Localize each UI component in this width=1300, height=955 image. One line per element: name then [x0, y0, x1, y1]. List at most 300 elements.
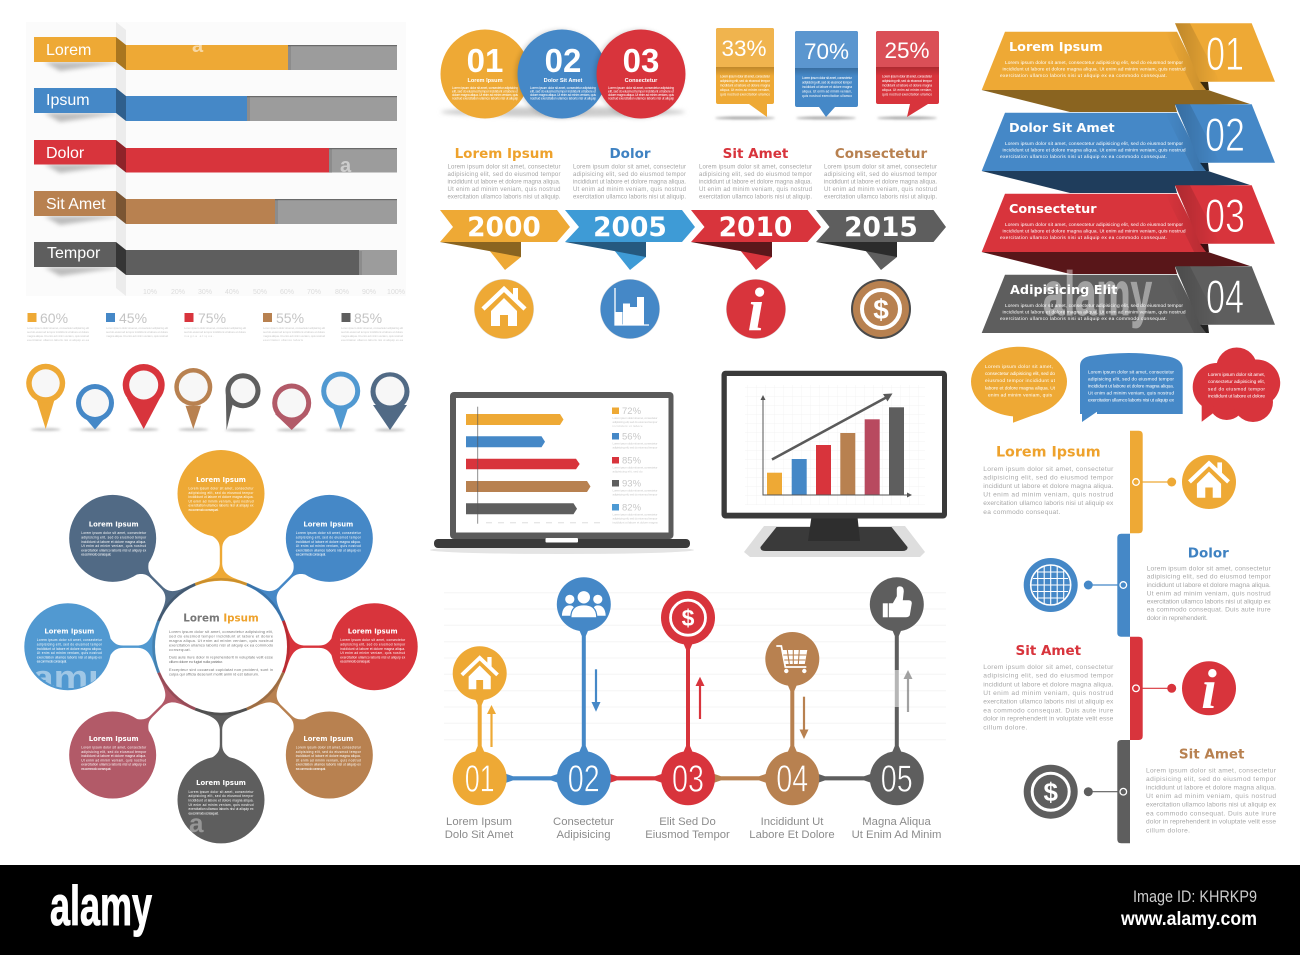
legend item 45%: Lorem ipsum dolor sit amet, consectetur adipisicing elit	[106, 326, 168, 330]
footer url: www.alamy.com	[1120, 909, 1257, 930]
petal shapes: bottom left rose	[51, 616, 252, 817]
circle 03	[596, 30, 686, 118]
timeline row: Sit Amet: ea commodo consequat. Duis aute irure	[983, 707, 1114, 714]
circle 01: dolore magna aliqua. Ut enim ad minim veniam, quis	[452, 93, 518, 97]
petal text: left: Lorem Ipsum	[44, 628, 94, 636]
arrow 2000	[440, 210, 570, 270]
monitor with growth bar chart	[722, 371, 947, 557]
circle 02: 02	[545, 42, 581, 79]
step 01: 01	[465, 759, 495, 801]
petal shapes: left light blue	[24, 603, 221, 690]
ribbon 02: Lorem ipsum dolor sit amet, consectetur adipisicing elit, sed do eiusmod tempor	[1005, 141, 1183, 147]
timeline row: Dolor: Ut enim ad minim veniam, quis nostrud	[1147, 590, 1271, 597]
arrow up	[696, 677, 704, 719]
box 33%: aliqua. Ut enim ad minim veniam,	[720, 88, 770, 92]
ribbon 02: 02	[1205, 108, 1245, 161]
circle 02: Lorem ipsum dolor sit amet, consectetur adipisicing	[530, 86, 596, 90]
column: Lorem Ipsum: exercitation ullamco laboris nisi ut aliquip.	[448, 194, 561, 200]
pin rose	[272, 384, 311, 431]
petal text: top	[188, 476, 254, 512]
circle 02: elit, sed do eiusmod tempor incididunt ut labore et	[530, 90, 596, 94]
bar row: Dolor	[34, 140, 397, 177]
circle 02: Dolor Sit Amet	[544, 78, 582, 84]
petal text: top left: Ut enim ad minim veniam, quis nostrud	[81, 544, 146, 548]
column: Consectetur	[824, 146, 937, 200]
timeline row: Sit Amet: adipisicing elit, sed do eiusmod tempor	[983, 673, 1114, 680]
icon: people	[561, 590, 606, 618]
ribbon 02: Dolor Sit Amet	[1009, 121, 1115, 136]
legend item 45%: 45%	[119, 310, 147, 326]
panel: percentage speech boxes	[715, 28, 939, 119]
pin tan	[174, 368, 212, 431]
center circle: sed do eiusmod tempor incididunt ut labore et dolore	[169, 634, 273, 638]
watermark on bottom petal: a	[189, 808, 204, 838]
petal text: top right: exercitation ullamco laboris nisi ut aliquip ex	[296, 548, 361, 552]
laptop legend: Lorem ipsum dolor sit amet, consectetur	[612, 416, 658, 420]
petal text: bottom left: exercitation ullamco laboris nisi ut aliquip ex	[81, 763, 147, 767]
box 33%	[715, 28, 775, 119]
box 70%: aliqua. Ut enim ad minim veniam,	[802, 90, 852, 94]
circle 03: Consectetur	[625, 78, 658, 84]
column: Dolor	[573, 146, 686, 200]
bubble: oval: consectetur adipisicing elit, sed do	[985, 371, 1055, 377]
box 25%: incididunt ut labore et dolore magna	[882, 84, 932, 88]
laptop legend: adipisicing elit, sed do eiusmod tempor	[612, 492, 658, 496]
petal text: bottom right: adipisicing elit, sed do eiusmod tempor	[296, 750, 362, 754]
box 33%: 33%	[721, 36, 767, 61]
column: Sit Amet: Ut enim ad minim veniam, quis nostrud	[699, 187, 812, 193]
petal text: right: Lorem ipsum dolor sit amet, consectetur	[340, 638, 406, 642]
panel: year timeline arrows	[440, 210, 946, 270]
pin light blue	[321, 372, 360, 431]
timeline row: Sit Amet second: dolor in reprehenderit in voluptate velit esse	[1146, 819, 1276, 826]
pin red	[123, 364, 165, 431]
footer logo: alamy	[50, 874, 152, 937]
circle 03: dolore magna aliqua. Ut enim ad minim veniam, quis	[608, 93, 674, 97]
box 70%: incididunt ut labore et dolore magna	[802, 85, 852, 89]
petal text: top: Ut enim ad minim veniam, quis nostrud	[188, 499, 254, 503]
legend item 85%: exercitation ullamco laboris nisi ut aliquip ex ea	[341, 338, 403, 342]
ribbon 03: incididunt ut labore et dolore magna aliqua. Ut enim ad minim veniam, quis nostrud	[1002, 228, 1186, 234]
laptop legend: Lorem ipsum dolor sit amet, consectetur	[612, 488, 658, 492]
pin gray	[225, 373, 260, 431]
laptop legend: 85%	[622, 456, 642, 466]
chart axis labels: 30%	[198, 289, 212, 296]
laptop legend: 56%	[622, 432, 642, 442]
timeline row: Lorem Ipsum: Lorem ipsum dolor sit amet, consectetur	[983, 466, 1114, 473]
icon: house badge	[474, 279, 534, 339]
legend item 85%: Lorem ipsum dolor sit amet, consectetur adipisicing elit	[341, 326, 403, 330]
timeline row: Dolor: Lorem ipsum dolor sit amet, consectetur	[1147, 565, 1271, 572]
column: Sit Amet	[699, 146, 812, 200]
timeline row: Dolor: ea commodo consequat. Duis aute irure	[1147, 607, 1271, 614]
petal text: top: Lorem Ipsum	[196, 476, 246, 484]
step 02: 02	[568, 759, 600, 801]
laptop bars	[466, 407, 600, 524]
ribbon 04: exercitation ullamco laboris nisi ut aliquip ex ea commodo consequat.	[1000, 316, 1167, 322]
column: Consectetur: Lorem ipsum dolor sit amet, consectetur	[824, 164, 937, 170]
bar row: Sit Amet	[34, 191, 397, 225]
icon: dollar: $	[1043, 777, 1058, 807]
bubble: oval: enim ad minim veniam, quis	[988, 392, 1053, 398]
bar row: Dolor: a	[340, 155, 352, 177]
laptop legend: 93%	[622, 478, 642, 490]
timeline row: Sit Amet: Sit Amet	[1015, 643, 1082, 659]
petal text: right: adipisicing elit, sed do eiusmod tempor	[340, 642, 406, 646]
laptop legend: Lorem ipsum dolor sit amet, consectetur	[612, 512, 658, 516]
timeline row: Sit Amet second: Lorem ipsum dolor sit amet, consectetur	[1146, 767, 1277, 774]
chart axis labels: 10%	[143, 289, 157, 296]
panel: four text columns	[448, 146, 937, 200]
bubble: rectangle	[1080, 353, 1183, 422]
bubble: rectangle: Ut enim ad minim veniam, quis nostrud	[1088, 391, 1174, 397]
laptop legend: incididunt ut labore	[612, 424, 643, 428]
center circle: culpa qui officia deserunt mollit anim id est laborum.	[169, 671, 259, 676]
step 02: Adipisicing	[556, 829, 611, 841]
petal text: bottom: exercitation ullamco laboris nisi ut aliquip ex	[188, 807, 254, 811]
petal text: right	[340, 628, 406, 664]
timeline row: Sit Amet: cillum dolore.	[983, 724, 1027, 731]
timeline row: Sit Amet: dolor in reprehenderit in voluptate velit esse	[983, 716, 1114, 723]
bar row: Lorem: Lorem	[46, 42, 91, 59]
center circle: Lorem ipsum dolor sit amet, consectetur adipisicing elit,	[169, 629, 273, 634]
laptop legend: adipisicing elit, sed do eiusmod tempor	[612, 446, 658, 450]
circle 01	[440, 30, 530, 118]
bar row: Sit Amet: Sit Amet	[46, 196, 106, 213]
laptop legend: 72%	[622, 406, 642, 417]
icon: info badge: i	[748, 277, 765, 344]
ribbon 03: 03	[1205, 189, 1245, 242]
legend item 75%: sed do eiusmod tempor incididunt ut labore et dolore	[184, 330, 246, 334]
petal text: bottom right: incididunt ut labore et dolore magna aliqua.	[296, 754, 361, 758]
petal text: bottom: Lorem ipsum dolor sit amet, consectetur	[188, 790, 254, 794]
timeline row: Sit Amet second: Ut enim ad minim veniam, quis nostrud	[1146, 793, 1276, 800]
step 01: Lorem Ipsum	[446, 816, 512, 828]
petal text: left	[37, 628, 103, 664]
column: Consectetur: Consectetur	[835, 146, 927, 162]
bubble: oval: eiusmod tempor incididunt ut	[985, 378, 1056, 384]
petal text: bottom right: exercitation ullamco laboris nisi ut aliquip ex	[296, 763, 361, 767]
laptop legend: adipisicing elit, sed do eiusmod tempor	[612, 420, 658, 424]
bubble: rectangle: exercitation ullamco laboris nisi ut aliquip ex	[1088, 398, 1175, 404]
center circle: exercitation ullamco laboris nisi ut aliquip ex ea commodo	[169, 642, 273, 648]
circle 03: elit, sed do eiusmod tempor incididunt ut labore et	[608, 90, 674, 94]
ribbon 04: incididunt ut labore et dolore magna aliqua. Ut enim ad minim veniam, quis nostrud	[1002, 310, 1186, 316]
arrow up	[487, 705, 496, 747]
bubble: cloud: consectetur adipisicing elit,	[1208, 379, 1265, 385]
column: Dolor: adipisicing elit, sed do eiusmod tempor	[573, 172, 686, 178]
petal text: left: incididunt ut labore et dolore magna aliqua.	[37, 647, 102, 651]
legend item 85%: magna aliqua. Ut enim ad minim veniam, quis nostrud	[341, 334, 403, 338]
pin orange	[26, 364, 65, 431]
legend item 60%: sed do eiusmod tempor incididunt ut labore et dolore	[27, 330, 89, 334]
panel: ribbon list	[982, 23, 1275, 333]
pin navy	[370, 372, 410, 431]
petal text: top left: exercitation ullamco laboris nisi ut aliquip ex	[81, 548, 147, 552]
petal text: bottom left: incididunt ut labore et dolore magna aliqua.	[81, 754, 146, 758]
arrow down	[800, 697, 808, 739]
step 04: Incididunt Ut	[761, 816, 824, 828]
timeline row: Lorem Ipsum: adipisicing elit, sed do eiusmod tempor	[983, 475, 1114, 482]
petal text: top right: adipisicing elit, sed do eiusmod tempor	[296, 536, 362, 540]
legend item 45%: sed do eiusmod tempor incididunt ut labore et dolore	[106, 330, 168, 334]
laptop legend: adipisicing elit, sed do	[612, 470, 643, 474]
laptop legend: 82%	[622, 502, 642, 514]
petal text: bottom: incididunt ut labore et dolore magna aliqua.	[188, 799, 254, 803]
timeline row: Dolor: adipisicing elit, sed do eiusmod tempor	[1147, 574, 1271, 581]
column: Dolor: Ut enim ad minim veniam, quis nostrud	[573, 187, 686, 193]
box 70%: quis nostrud exercitation ullamco	[802, 94, 852, 98]
petal text: bottom: ea commodo consequat.	[188, 811, 219, 815]
arrow 2010	[691, 210, 821, 270]
ribbon 01: incididunt ut labore et dolore magna aliqua. Ut enim ad minim veniam, quis nostrud	[1002, 66, 1186, 72]
petal shapes: right red	[221, 603, 418, 690]
step 03: Eiusmod Tempor	[645, 829, 730, 841]
chart axis labels	[143, 289, 405, 296]
watermark on left petal: amu	[32, 659, 112, 695]
timeline row: Lorem Ipsum: ea commodo consequat.	[983, 509, 1060, 516]
petal text: top: incididunt ut labore et dolore magna aliqua.	[188, 495, 254, 499]
column: Dolor: Lorem ipsum dolor sit amet, consectetur	[573, 164, 686, 170]
petal text: right: incididunt ut labore et dolore magna aliqua.	[340, 647, 405, 651]
box 70%: adipisicing elit, sed do eiusmod tempor	[802, 80, 853, 84]
legend item 60%: 60%	[40, 310, 68, 326]
bar row: Ipsum: Ipsum	[46, 92, 90, 109]
timeline row: Sit Amet second: adipisicing elit, sed do eiusmod tempor	[1146, 776, 1277, 783]
bar row: Tempor: Tempor	[47, 245, 101, 262]
bubble: cloud	[1193, 348, 1280, 422]
panel: speech bubbles	[971, 347, 1280, 423]
chart axis labels: 90%	[362, 289, 376, 296]
panel: horizontal bar chart	[26, 22, 406, 296]
column: Lorem Ipsum: adipisicing elit, sed do eiusmod tempor	[448, 172, 560, 178]
center circle: Lorem Ipsum	[183, 613, 259, 625]
petal text: top: adipisicing elit, sed do eiusmod tempor	[188, 491, 254, 495]
chart axis labels: 20%	[171, 289, 185, 296]
step 03	[645, 591, 730, 841]
column: Consectetur: exercitation ullamco laboris nisi ut aliquip.	[824, 194, 937, 200]
petal text: right: ea commodo consequat.	[340, 660, 370, 664]
step 05	[852, 577, 941, 841]
ribbon 02	[982, 104, 1275, 193]
center circle: consequat.	[169, 647, 191, 652]
box 33%: incididunt ut labore et dolore magna	[720, 84, 770, 88]
petal text: top: ea commodo consequat.	[188, 508, 219, 512]
step 02	[553, 577, 614, 841]
ribbon 04: Adipisicing Elit	[1010, 283, 1117, 298]
bar row: Lorem: a	[192, 35, 204, 57]
legend item 85%: 85%	[354, 310, 382, 326]
petal text: bottom: Ut enim ad minim veniam, quis nostrud	[188, 803, 254, 807]
box 25%	[876, 31, 939, 119]
ribbon 01: exercitation ullamco laboris nisi ut aliquip ex ea commodo consequat.	[1000, 73, 1167, 79]
petal shapes: top orange	[178, 450, 264, 647]
petal text: bottom left: adipisicing elit, sed do eiusmod tempor	[81, 750, 147, 754]
arrow 2005	[565, 210, 695, 270]
step 04: 04	[776, 759, 808, 801]
arrow 2015	[816, 210, 946, 270]
ribbon 04: Lorem ipsum dolor sit amet, consectetur adipisicing elit, sed do eiusmod tempor	[1005, 303, 1183, 309]
legend item 75%: Lorem ipsum dolor sit amet, consectetur adipisicing elit	[184, 326, 246, 330]
icon: globe	[1024, 558, 1078, 612]
petal text: top right	[296, 520, 362, 557]
petal text: bottom left	[81, 735, 147, 771]
timeline row: Sit Amet second: Sit Amet	[1179, 746, 1245, 762]
petal text: top: exercitation ullamco laboris nisi ut aliquip ex	[188, 504, 254, 508]
bubble: rectangle: adipisicing elit, sed do eiusmod tempor	[1088, 376, 1174, 382]
box 33%: adipisicing elit, sed do eiusmod tempor	[720, 79, 771, 83]
ribbon 03: exercitation ullamco laboris nisi ut aliquip ex ea commodo consequat.	[1000, 235, 1167, 241]
box 70%: Lorem ipsum dolor sit amet, consectetur	[802, 76, 853, 80]
arrow 2000: 2000	[467, 212, 541, 243]
petal text: bottom: adipisicing elit, sed do eiusmod tempor	[188, 794, 254, 798]
bubble: rectangle: incididunt ut labore et dolore magna aliqua.	[1088, 384, 1174, 390]
legend item 60%	[27, 310, 89, 342]
step 02: Consectetur	[553, 816, 614, 828]
laptop legend: Lorem ipsum dolor sit amet, consectetur	[612, 466, 658, 470]
ribbon 02: exercitation ullamco laboris nisi ut aliquip ex ea commodo consequat.	[1000, 154, 1167, 160]
circle 03: nostrud exercitation ullamco laboris nisi ut aliquip	[608, 96, 674, 100]
petal text: bottom right: Lorem ipsum dolor sit amet, consectetur	[296, 745, 362, 749]
laptop with arrow bar chart	[430, 392, 694, 554]
petal text: bottom left: Ut enim ad minim veniam, quis nostrud	[81, 758, 146, 762]
icon: dollar: $	[682, 605, 695, 631]
legend item 55%: 55%	[276, 310, 304, 326]
circle 01: Lorem ipsum dolor sit amet, consectetur adipisicing	[452, 86, 518, 90]
petal text: left: Lorem ipsum dolor sit amet, consectetur	[37, 638, 103, 642]
step 04: Labore Et Dolore	[749, 829, 835, 841]
bubble: rectangle: Lorem ipsum dolor sit amet, consectetur	[1088, 370, 1174, 376]
step 03: 03	[672, 759, 704, 801]
icon: dollar badge: $	[873, 294, 889, 325]
arrow up	[904, 670, 912, 712]
petal text: top left: adipisicing elit, sed do eiusmod tempor	[81, 536, 147, 540]
timeline row: Lorem Ipsum: Lorem Ipsum	[996, 445, 1101, 461]
legend item 60%: exercitation ullamco laboris nisi ut aliquip ex ea	[27, 338, 89, 342]
circle 01: 01	[467, 42, 503, 79]
petal text: bottom right: Lorem Ipsum	[303, 735, 353, 743]
laptop legend: Lorem ipsum dolor sit amet, consectetur	[612, 442, 658, 446]
timeline row: Dolor: incididunt ut labore et dolore magna aliqua.	[1147, 582, 1271, 589]
petal text: top left: ea commodo consequat.	[81, 553, 111, 557]
step 03: Elit Sed Do	[659, 816, 716, 828]
laptop legend	[612, 406, 658, 524]
circle 03: Lorem ipsum dolor sit amet, consectetur adipisicing	[608, 86, 674, 90]
footer bar	[0, 865, 1300, 955]
box 25%: 25%	[884, 38, 930, 63]
box 25%: quis nostrud exercitation ullamco	[882, 92, 932, 96]
petal text: left: exercitation ullamco laboris nisi ut aliquip ex	[37, 655, 102, 659]
panel: numbered overlapping circles	[440, 30, 686, 118]
timeline row: Sit Amet: Ut enim ad minim veniam, quis nostrud	[983, 690, 1114, 697]
bubble: cloud: sed do eiusmod tempor	[1208, 386, 1265, 392]
box 25%: aliqua. Ut enim ad minim veniam,	[882, 88, 932, 92]
circle 01: elit, sed do eiusmod tempor incididunt ut labore et	[452, 90, 518, 94]
box 33%: Lorem ipsum dolor sit amet, consectetur	[720, 74, 771, 78]
legend item 55%: magna aliqua. Ut enim ad minim veniam, quis nostrud	[263, 334, 325, 338]
arrow 2010: 2010	[719, 212, 792, 243]
bubble: oval	[971, 347, 1067, 423]
center circle: Excepteur sint occaecat cupidatat non proident, sunt in	[169, 667, 273, 672]
icon: dollar	[670, 600, 706, 635]
icon: bar chart badge	[600, 279, 660, 339]
petal text: top right: ea commodo consequat.	[296, 553, 326, 557]
legend: bar chart percentages	[27, 310, 403, 342]
timeline row: Lorem Ipsum: exercitation ullamco laboris nisi ut aliquip ex	[983, 500, 1114, 507]
petal shapes: bottom right tan	[190, 616, 391, 817]
step 01	[445, 646, 514, 841]
petal text: left: Ut enim ad minim veniam, quis nostrud	[37, 651, 102, 655]
bubble: cloud: incididunt ut labore et dolore	[1208, 394, 1265, 400]
circle 01: nostrud exercitation ullamco laboris nisi ut aliquip	[452, 96, 518, 100]
chart axis labels: 100%	[387, 289, 405, 296]
box 33%: quis nostrud exercitation ullamco	[720, 92, 770, 96]
timeline row: Dolor: exercitation ullamco laboris nisi ut aliquip ex	[1147, 598, 1271, 605]
petal text: left: ea commodo consequat.	[37, 660, 67, 664]
petal text: top right: Ut enim ad minim veniam, quis nostrud	[296, 544, 361, 548]
timeline row: Lorem Ipsum: Ut enim ad minim veniam, quis nostrud	[983, 492, 1114, 499]
petal text: top right: incididunt ut labore et dolore magna aliqua.	[296, 540, 361, 544]
footer image id: Image ID: KHRKP9	[1133, 888, 1257, 906]
timeline row: Sit Amet second: ea commodo consequat. Duis aute irure	[1146, 810, 1276, 817]
column: Sit Amet: adipisicing elit, sed do eiusmod tempor	[699, 172, 812, 178]
step 05: Ut Enim Ad Minim	[852, 829, 941, 841]
chart axis labels: 50%	[253, 289, 267, 296]
bar row: Ipsum	[34, 88, 397, 122]
timeline row: Dolor: dolor in reprehenderit.	[1147, 615, 1208, 622]
petal text: right: exercitation ullamco laboris nisi ut aliquip ex	[340, 655, 406, 659]
bar row: Lorem	[34, 35, 397, 71]
legend item 45%	[106, 310, 168, 338]
icon: house	[462, 657, 498, 689]
chart axis labels: 40%	[225, 289, 239, 296]
box 70%: 70%	[804, 39, 849, 64]
petal text: left: adipisicing elit, sed do eiusmod tempor	[37, 642, 103, 646]
legend item 45%: magna aliqua. Ut enim ad minim veniam, quis nostrud	[106, 334, 168, 338]
circle 02: nostrud exercitation ullamco laboris nisi ut aliquip	[530, 96, 596, 100]
icon: house	[1182, 455, 1236, 509]
legend item 75%: 75%	[198, 310, 226, 326]
column: Dolor: incididunt ut labore et dolore magna aliqua.	[573, 180, 686, 186]
column: Sit Amet: incididunt ut labore et dolore magna aliqua.	[699, 180, 812, 186]
ribbon 01: Lorem ipsum dolor sit amet, consectetur adipisicing elit, sed do eiusmod tempor	[1005, 60, 1183, 66]
petal text: top left: Lorem ipsum dolor sit amet, consectetur	[81, 531, 147, 535]
petal text: bottom right: ea commodo consequat.	[296, 767, 326, 771]
center circle: magna aliqua. Ut enim ad minim veniam, quis nostrud	[169, 638, 273, 643]
column: Lorem Ipsum: incididunt ut labore et dolore magna aliqua.	[448, 180, 561, 186]
icon: cart	[776, 646, 807, 673]
petal shapes: bottom gray	[178, 647, 264, 843]
bar row: Tempor	[34, 242, 397, 276]
legend item 55%: Lorem ipsum dolor sit amet, consectetur adipisicing elit	[263, 326, 325, 330]
chart axis labels: 80%	[335, 289, 349, 296]
box 25%: Lorem ipsum dolor sit amet, consectetur	[882, 74, 933, 78]
bubble: cloud: Lorem ipsum dolor sit amet,	[1208, 372, 1265, 378]
connectors between steps	[505, 774, 872, 783]
petal text: top right: Lorem Ipsum	[303, 520, 353, 528]
icon: dollar	[1024, 765, 1078, 819]
step 04	[749, 632, 835, 841]
petal text: top right: Lorem ipsum dolor sit amet, consectetur	[296, 531, 362, 535]
legend item 55%	[263, 310, 325, 342]
ribbon 02: incididunt ut labore et dolore magna aliqua. Ut enim ad minim veniam, quis nostrud	[1002, 148, 1186, 154]
timeline row: Sit Amet second: cillum dolore.	[1146, 827, 1190, 834]
legend item 60%: Lorem ipsum dolor sit amet, consectetur adipisicing elit	[27, 326, 89, 330]
petal text: top left: incididunt ut labore et dolore magna aliqua.	[81, 540, 146, 544]
step 05: Magna Aliqua	[862, 816, 931, 828]
arrow 2015: 2015	[844, 212, 918, 243]
panel: vertical timeline	[983, 431, 1277, 843]
